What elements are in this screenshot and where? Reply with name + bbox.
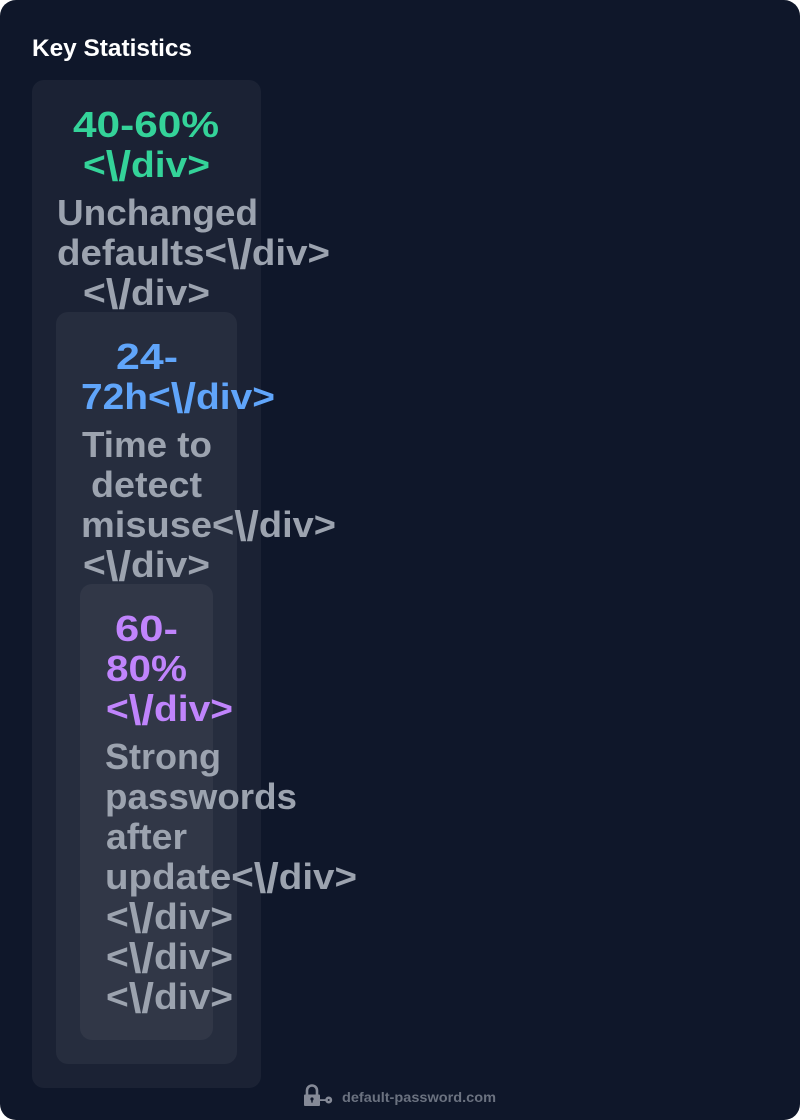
stat label: time to detect misuse: \/: [106, 542, 131, 590]
stat label: time to detect misuse: div>: [259, 504, 336, 545]
stat label: strong passwords after update: <: [106, 936, 127, 977]
stat label: unchanged defaults: \/: [106, 270, 131, 318]
stat label: time to detect misuse: div>: [131, 544, 210, 585]
stat value: 24-72h: \/: [171, 374, 196, 422]
stat label: strong passwords after update: passwords: [105, 776, 297, 817]
stat label: unchanged defaults: \/: [227, 230, 252, 278]
stat label: strong passwords after update: update<: [105, 856, 244, 897]
stat label: strong passwords after update: <: [106, 976, 127, 1017]
stat label: time to detect misuse: Time to: [82, 424, 212, 465]
stat value: 60-80%: [106, 608, 233, 734]
panel: stat card 3 (nested container): [80, 584, 357, 1040]
stat label: unchanged defaults: Unchanged: [57, 192, 258, 233]
stat label: strong passwords after update: [105, 736, 357, 1022]
stat value: 24-72h: 72h<: [81, 376, 164, 417]
icon: padlock with key: [304, 1086, 332, 1106]
stat label: unchanged defaults: [57, 192, 330, 318]
stat label: time to detect misuse: \/: [234, 502, 259, 550]
stat value: 60-80%: \/: [129, 686, 154, 734]
stat value: 40-60%: [73, 104, 219, 190]
panel: stat card 1 (nested container): [32, 80, 357, 1088]
stat value: 60-80%: 60-: [115, 608, 178, 649]
stat label: strong passwords after update: div>: [154, 936, 233, 977]
panel: stat card 2 (nested container): [56, 312, 357, 1064]
stat label: strong passwords after update: Strong: [105, 736, 221, 777]
stat label: strong passwords after update: div>: [154, 976, 233, 1017]
stat label: unchanged defaults: div>: [252, 232, 330, 273]
stat value: 60-80%: <: [106, 688, 127, 729]
footer brand text: default-password.com: [342, 1089, 496, 1105]
stat label: strong passwords after update: \/: [129, 894, 154, 942]
stat value: 40-60%: div>: [131, 144, 210, 185]
stat label: time to detect misuse: misuse<: [81, 504, 226, 545]
stat value: 60-80%: div>: [154, 688, 233, 729]
stat label: unchanged defaults: <: [83, 272, 104, 313]
stat value: 40-60%: \/: [106, 142, 131, 190]
stat value: 40-60%: <: [83, 144, 104, 185]
stat label: strong passwords after update: \/: [129, 934, 154, 982]
stat label: time to detect misuse: [81, 424, 336, 590]
stat value: 24-72h: [81, 336, 275, 422]
stat label: strong passwords after update: \/: [254, 854, 279, 902]
title: Key Statistics: [32, 35, 192, 62]
stat label: strong passwords after update: div>: [279, 856, 357, 897]
stat value: 24-72h: div>: [196, 376, 275, 417]
stat value: 40-60%: 40-60%: [73, 104, 219, 145]
stat label: strong passwords after update: after: [106, 816, 187, 857]
stat label: strong passwords after update: \/: [129, 974, 154, 1022]
stat value: 24-72h: 24-: [116, 336, 178, 377]
stat label: time to detect misuse: <: [83, 544, 104, 585]
stat label: time to detect misuse: detect: [91, 464, 202, 505]
stat label: strong passwords after update: div>: [154, 896, 233, 937]
stat label: strong passwords after update: <: [106, 896, 127, 937]
stat label: unchanged defaults: defaults<: [57, 232, 216, 273]
stat label: unchanged defaults: div>: [131, 272, 210, 313]
stat value: 60-80%: 80%: [106, 648, 187, 689]
